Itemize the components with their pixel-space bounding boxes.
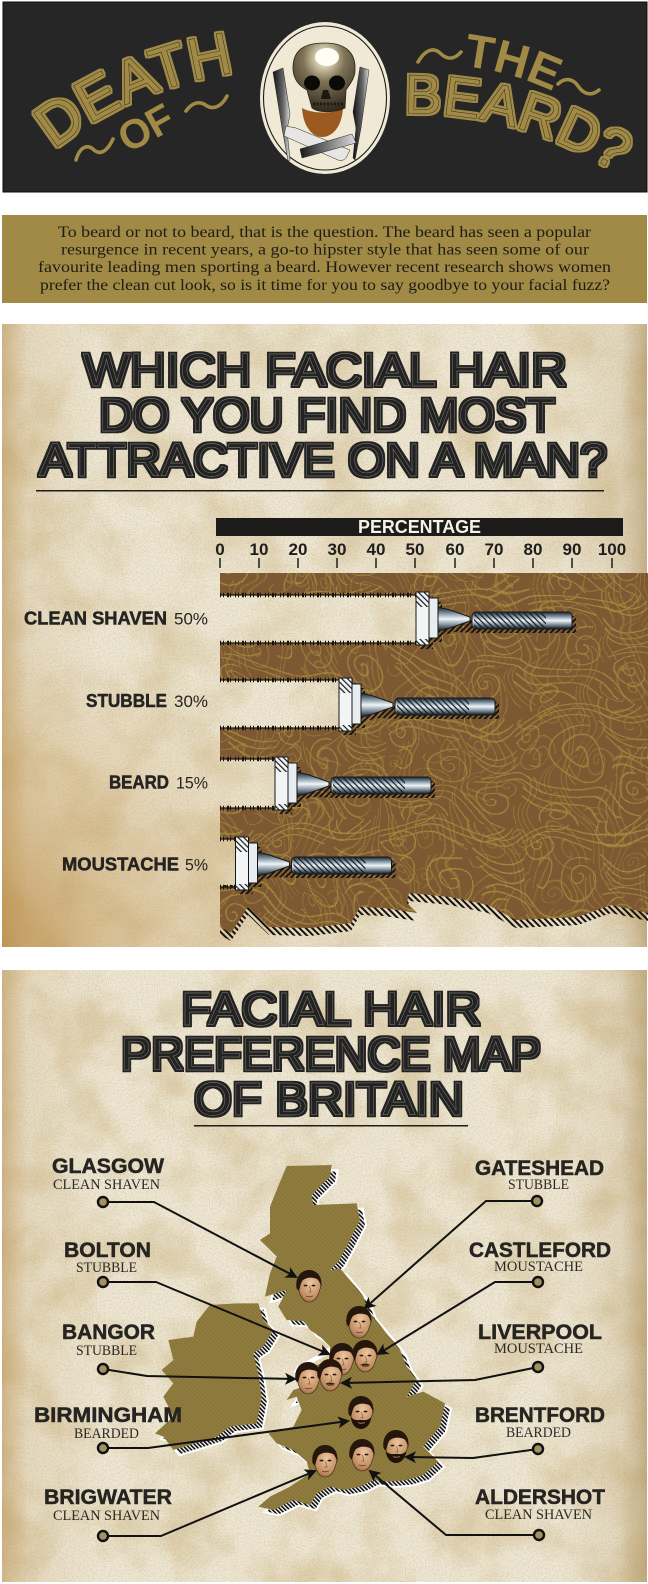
city label: Glasgow: CLEAN SHAVEN [53, 1177, 161, 1193]
intro text panel: resurgence in recent years, a go-to hipster style that has seen some of our [61, 242, 590, 258]
city label: Brentford: BRENTFORD [475, 1404, 605, 1427]
percentage axis: PERCENTAGE [358, 517, 481, 537]
city label: Glasgow: GLASGOW [52, 1155, 164, 1178]
percentage axis: 30 [328, 540, 346, 559]
percentage axis: 50 [406, 540, 424, 559]
city label: Gateshead: STUBBLE [508, 1177, 569, 1193]
city label: Brentford [475, 1404, 605, 1441]
heading: facial hair preference map of Britain: FACIAL HAIR [181, 983, 481, 1035]
icon: crossed razors [273, 67, 369, 161]
faces on map [295, 1270, 409, 1477]
city label: Aldershot: CLEAN SHAVEN [485, 1507, 593, 1523]
heading: THE: THE [468, 34, 563, 90]
bar: moustache 5% [220, 837, 396, 894]
heading: facial hair preference map of Britain [121, 983, 541, 1125]
city label: Brigwater: BRIGWATER [44, 1486, 172, 1509]
city label: Birmingham [34, 1404, 182, 1442]
city label: Bangor: STUBBLE [76, 1343, 137, 1359]
city label: Castleford [469, 1239, 611, 1275]
leader arrows [103, 1201, 539, 1536]
city label: Brigwater [44, 1486, 172, 1524]
city label: Aldershot [475, 1486, 605, 1523]
heading: which facial hair: ATTRACTIVE ON A MAN? [39, 434, 607, 486]
city label: Castleford: MOUSTACHE [494, 1259, 583, 1275]
percentage axis: 10 [250, 540, 268, 559]
city label: Gateshead: GATESHEAD [475, 1157, 604, 1180]
panel: preference map of Britain [2, 970, 647, 1582]
city label: Glasgow [52, 1155, 164, 1193]
panel: facial hair attractiveness chart [2, 324, 648, 980]
percentage axis: 70 [485, 540, 503, 559]
leader end dots [98, 1196, 544, 1541]
bar: beard 15% [220, 757, 435, 814]
header banner [2, 2, 648, 192]
percentage axis: 60 [446, 540, 464, 559]
percentage axis [215, 517, 626, 568]
city label: Liverpool: LIVERPOOL [478, 1321, 602, 1344]
icon: ginger beard [302, 108, 343, 137]
city label: Liverpool [478, 1321, 602, 1357]
bar labels: BEARD [109, 772, 169, 792]
bar: clean shaven 50% [220, 592, 576, 649]
percentage axis: 90 [563, 540, 581, 559]
city label: Gateshead [475, 1157, 604, 1193]
heading: OF: OF [120, 102, 170, 148]
bar labels: CLEAN SHAVEN [24, 608, 167, 628]
heading: BEARD?: BEARD? [406, 72, 633, 168]
bar labels: 5% [185, 856, 208, 874]
heading: which facial hair [39, 344, 607, 486]
percentage axis: 100 [598, 540, 626, 559]
intro text panel: To beard or not to beard, that is the question. The beard has seen a popular [58, 224, 592, 241]
beard hair background with bars shaved away [220, 573, 648, 941]
skull emblem [260, 22, 390, 174]
city label: Castleford: CASTLEFORD [469, 1239, 611, 1262]
heading: facial hair preference map of Britain: PREFERENCE MAP [121, 1028, 541, 1080]
city label: Aldershot: ALDERSHOT [475, 1486, 605, 1509]
city label: Birmingham: BIRMINGHAM [34, 1404, 182, 1427]
percentage axis: 80 [524, 540, 542, 559]
bar: stubble 30% [220, 678, 499, 735]
icon: skull [293, 43, 355, 112]
city label: Bangor: BANGOR [62, 1321, 155, 1344]
heading: DEATH: DEATH [31, 30, 232, 149]
city label: Bolton [64, 1239, 151, 1276]
city label: Bolton: BOLTON [64, 1239, 151, 1262]
intro text panel: prefer the clean cut look, so is it time for you to say goodbye to your facial fuzz? [40, 277, 610, 294]
heading: which facial hair: DO YOU FIND MOST [99, 389, 555, 441]
heading: facial hair preference map of Britain: OF BRITAIN [194, 1073, 464, 1125]
city label: Brentford: BEARDED [506, 1425, 571, 1441]
bar labels: MOUSTACHE [62, 854, 179, 874]
city label: Brigwater: CLEAN SHAVEN [53, 1508, 161, 1524]
heading: which facial hair: WHICH FACIAL HAIR [83, 344, 567, 396]
flourishes beside OF and THE [76, 50, 599, 160]
bar labels: STUBBLE [86, 691, 167, 711]
map of Britain and Ireland [155, 1165, 451, 1515]
percentage axis: 20 [289, 540, 307, 559]
bar labels [24, 608, 208, 874]
bar labels: 30% [174, 692, 208, 711]
percentage axis: 0 [215, 540, 225, 559]
city label: Liverpool: MOUSTACHE [494, 1341, 583, 1357]
percentage axis: 40 [367, 540, 385, 559]
bar labels: 50% [174, 610, 208, 628]
bar labels: 15% [176, 774, 208, 792]
intro text panel [2, 215, 647, 303]
intro text panel: favourite leading men sporting a beard. However recent research shows women [38, 259, 611, 276]
city label: Birmingham: BEARDED [74, 1426, 139, 1442]
city label: Bangor [62, 1321, 155, 1359]
city label: Bolton: STUBBLE [76, 1260, 137, 1276]
